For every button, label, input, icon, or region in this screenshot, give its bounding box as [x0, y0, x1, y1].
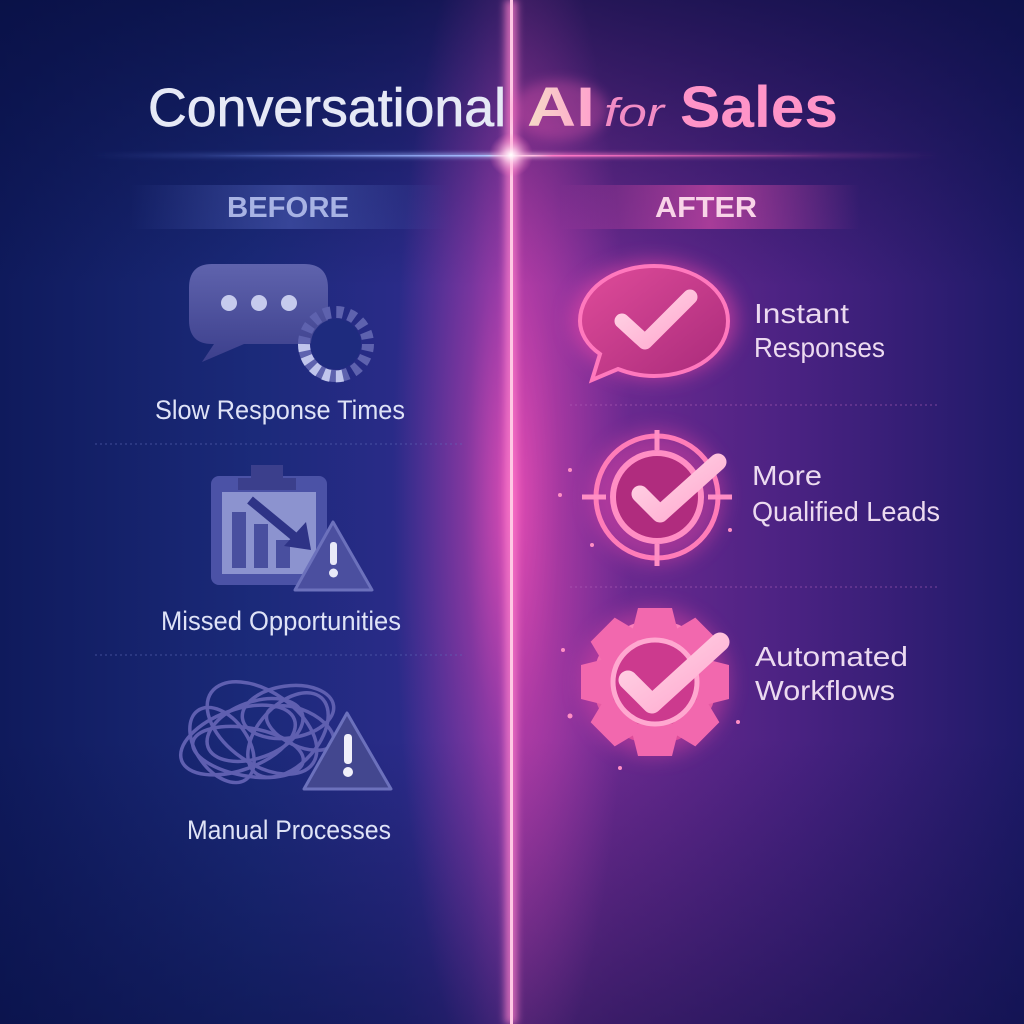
label: instant responses: Instant: [754, 298, 849, 329]
centre divider glow line: [505, 0, 517, 1024]
horizontal header line with flare: [90, 133, 940, 177]
label: slow response times: Slow Response Times: [155, 395, 405, 425]
icon: target with check: [558, 430, 732, 566]
label: more qualified leads: Qualified Leads: [752, 496, 940, 527]
title: Sales: [680, 75, 838, 140]
label: automated workflows: [755, 641, 908, 706]
label: more qualified leads: More: [752, 460, 822, 491]
title: Conversational: [148, 78, 506, 138]
label: automated workflows: Automated: [755, 641, 908, 672]
title: [148, 75, 838, 140]
label: more qualified leads: [752, 460, 940, 527]
icon: falling chart clipboard with warning: [211, 465, 372, 590]
icon: gear with check: [561, 608, 740, 770]
title: AI: [527, 75, 595, 138]
heading: after: AFTER: [655, 192, 757, 224]
label: manual processes: Manual Processes: [187, 815, 391, 845]
label: automated workflows: Workflows: [755, 675, 895, 706]
icon: chat bubble with check: [572, 262, 736, 380]
heading: before: BEFORE: [227, 192, 349, 224]
title: for: [604, 91, 666, 135]
label: instant responses: Responses: [754, 332, 885, 363]
label: missed opportunities: Missed Opportunities: [161, 606, 401, 636]
heading: before: [130, 185, 450, 229]
label: instant responses: [754, 298, 885, 363]
icon: slow chat bubble with spinner: [189, 264, 368, 376]
heading: after: [560, 185, 860, 229]
icon: tangled lines with warning: [171, 663, 391, 794]
